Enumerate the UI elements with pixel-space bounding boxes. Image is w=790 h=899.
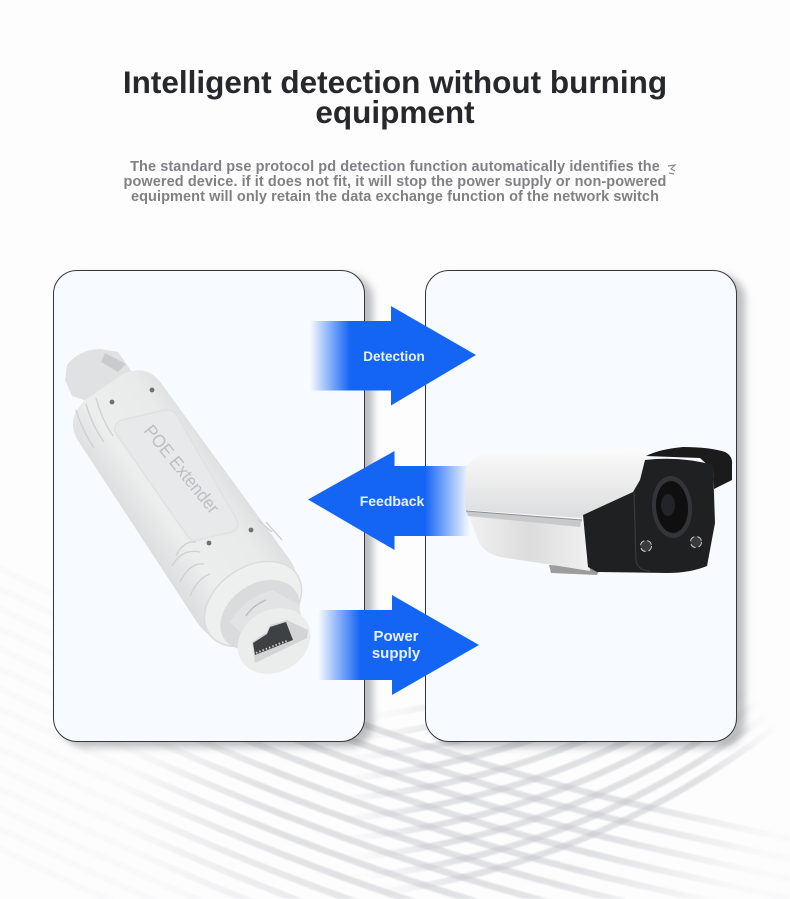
mount xyxy=(549,565,600,575)
rib xyxy=(466,511,582,527)
lens xyxy=(650,475,694,539)
printed label: POE Extender xyxy=(140,421,223,517)
arrow: detection xyxy=(310,306,476,406)
panel: camera xyxy=(425,270,737,742)
description text: powered device. if it does not fit, it will stop the power supply or non-powered xyxy=(124,174,666,190)
title: Intelligent detection without burning xyxy=(123,64,667,100)
collar ring xyxy=(188,544,318,664)
panel: POE extender xyxy=(53,270,365,742)
ribs xyxy=(76,398,282,596)
main body xyxy=(56,356,309,651)
arrow: power supply xyxy=(318,595,479,695)
title xyxy=(123,64,667,130)
arrow: detection: Detection xyxy=(363,349,425,364)
arrow: power supply: supply xyxy=(372,645,421,662)
black front xyxy=(583,459,715,573)
LEDs xyxy=(640,540,652,552)
arrow: feedback xyxy=(308,451,470,550)
description text: equipment will only retain the data exchange function of the network switch xyxy=(131,189,659,205)
description text: The standard pse protocol pd detection function automatically identifies the xyxy=(130,159,660,175)
connector neck xyxy=(230,590,304,662)
lower housing xyxy=(469,516,590,571)
title: equipment xyxy=(315,94,475,130)
upper housing xyxy=(465,448,652,518)
arrow: power supply: Power xyxy=(373,628,419,645)
background: woven mesh pattern xyxy=(148,705,757,899)
rear cap xyxy=(65,349,132,402)
RJ45 port xyxy=(252,620,308,663)
label plate xyxy=(115,410,238,540)
arrow: feedback: Feedback xyxy=(360,493,425,509)
hood xyxy=(646,447,732,489)
description text xyxy=(124,159,666,205)
screw holes xyxy=(110,388,253,545)
connector head xyxy=(226,595,322,687)
